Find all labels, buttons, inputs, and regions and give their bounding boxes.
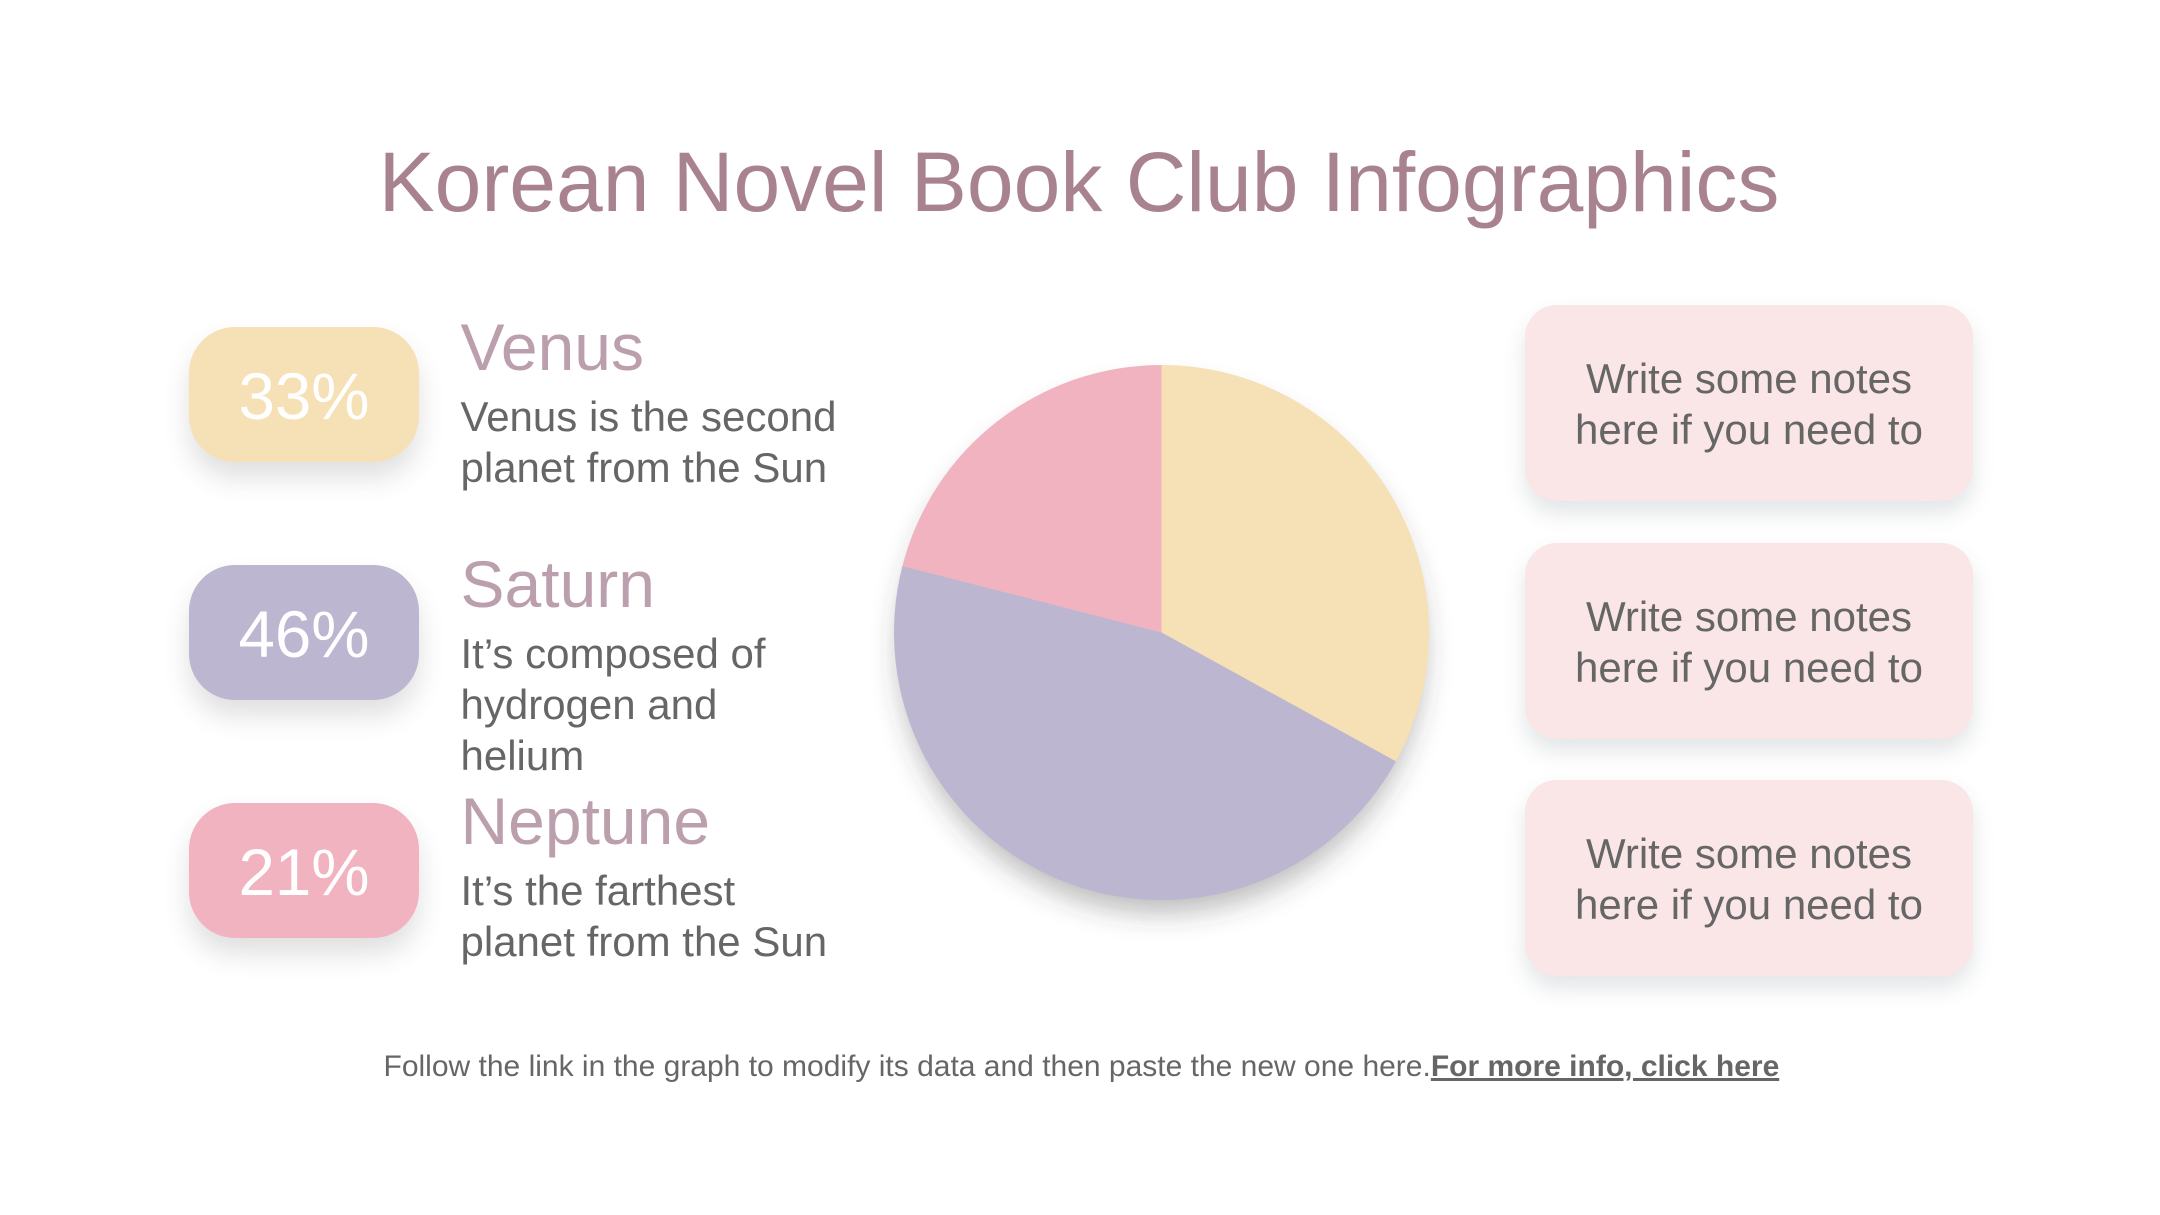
pie slice: Venus 33%: [1162, 365, 1429, 761]
note card 2: here if you need to: [1575, 644, 1923, 690]
text: Venus description: planet from the Sun: [460, 444, 827, 491]
text: Saturn description: helium: [460, 732, 584, 779]
text: Saturn description: It’s composed of: [460, 630, 766, 677]
note card 1: Write some notes: [1586, 355, 1912, 402]
text: Neptune description: planet from the Sun: [460, 918, 827, 965]
percentage pill: Saturn 46%: 46%: [238, 598, 370, 671]
percentage pill: Neptune 21%: 21%: [238, 836, 370, 909]
percentage pill: Saturn 46%: [189, 565, 419, 700]
heading: Neptune: Neptune: [460, 784, 710, 858]
pie chart: [882, 365, 1442, 930]
note card 3: here if you need to: [1575, 880, 1923, 928]
title: Korean Novel Book Club Infographics: [379, 135, 1779, 229]
note card 3: [1525, 780, 1973, 976]
note card 2: Write some notes: [1586, 593, 1912, 640]
text: Neptune description: It’s the farthest: [460, 867, 735, 914]
pie slice: Saturn 46%: [894, 566, 1396, 900]
footer note with link: Follow the link in the graph to modify its data and then paste the new one here.For more info, click here: [384, 1050, 1779, 1083]
text: Neptune description: [460, 867, 827, 965]
heading: Venus: Venus: [460, 310, 644, 384]
note card 2: [1525, 543, 1973, 739]
text: Venus description: Venus is the second: [460, 393, 836, 440]
note card 3: Write some notes: [1586, 830, 1912, 877]
percentage pill: Neptune 21%: [189, 803, 419, 938]
heading: Saturn: Saturn: [460, 547, 655, 621]
text: Saturn description: [460, 630, 766, 779]
percentage pill: Venus 33%: 33%: [238, 360, 370, 433]
text: Saturn description: hydrogen and: [460, 681, 717, 728]
percentage pill: Venus 33%: [189, 327, 419, 462]
text: Venus description: [460, 393, 836, 491]
pie slice: Neptune 21%: [902, 365, 1162, 632]
note card 1: [1525, 305, 1973, 501]
note card 1: here if you need to: [1575, 406, 1923, 452]
